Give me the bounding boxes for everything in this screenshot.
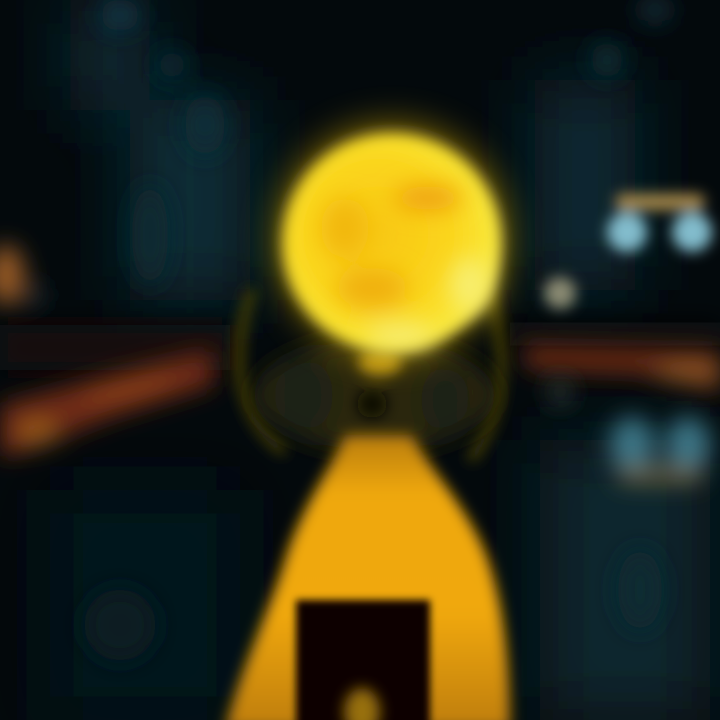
figure: dark silhouette below the moon bbox=[255, 340, 495, 450]
towers: left and right bbox=[84, 0, 671, 661]
building: right lit windows bbox=[544, 194, 712, 309]
doorway: small golden light bbox=[344, 688, 380, 720]
road: golden reflection bbox=[225, 435, 510, 720]
building: right water reflection bbox=[548, 380, 710, 482]
moon glow bbox=[276, 124, 508, 356]
doorway: black rectangle bbox=[296, 600, 430, 720]
light: far left orange glow bbox=[0, 245, 45, 305]
streak: right orange reflection bbox=[520, 345, 720, 392]
shoreline: dark bands bbox=[0, 322, 720, 370]
moon bbox=[283, 134, 501, 352]
moon: craters bbox=[321, 186, 490, 345]
figure: dim olive ring below the moon bbox=[239, 290, 501, 460]
streak: left orange reflection bbox=[0, 350, 215, 458]
figure: bright neck and dark centre bbox=[357, 349, 402, 418]
